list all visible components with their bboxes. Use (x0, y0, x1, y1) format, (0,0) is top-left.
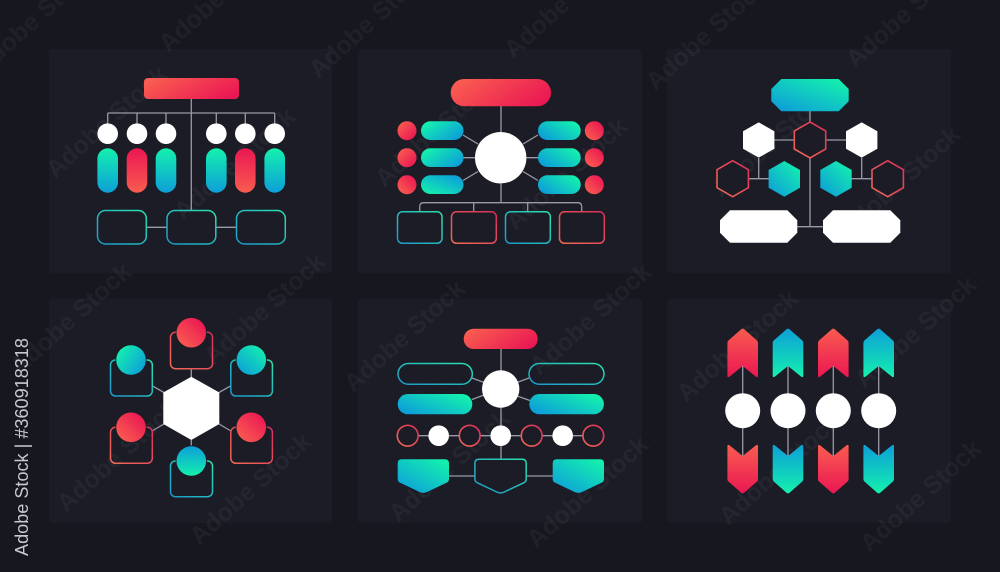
stock watermarks: Adobe Stock (339, 274, 471, 398)
middle outlined pentagon (475, 459, 526, 493)
down arrows (727, 445, 894, 493)
panel 4: radial hexagon diagram (110, 318, 272, 497)
panel 2: central circle diagram (398, 79, 604, 243)
outlined boxes (110, 332, 272, 497)
outlined pills (398, 364, 604, 384)
central circle (475, 132, 526, 183)
stock watermarks: Adobe Stock (370, 69, 502, 193)
stock watermarks: Adobe Stock (855, 434, 987, 558)
stock watermarks: Adobe Stock (199, 247, 331, 371)
white circles (428, 425, 573, 446)
connector lines (743, 366, 879, 456)
stock watermarks: Adobe Stock (185, 427, 317, 551)
left filled pentagon (398, 459, 449, 493)
stock watermarks: Adobe Stock (41, 60, 173, 184)
white circles (725, 393, 896, 428)
panel backgrounds (49, 49, 951, 523)
stock watermarks: Adobe Stock (384, 404, 516, 528)
white hexagons (743, 122, 877, 158)
connector lines (420, 106, 582, 212)
connector lines (408, 349, 593, 476)
outlined hexagons (717, 122, 903, 197)
central hexagon (163, 377, 219, 440)
stock watermarks: Adobe Stock (714, 407, 846, 531)
connector lines (733, 111, 888, 227)
panel 5: mixed flowchart (397, 329, 604, 493)
connector lines (108, 99, 275, 227)
side pills (421, 121, 581, 194)
white circles (97, 123, 285, 144)
up arrows (727, 329, 894, 377)
outlined circles (397, 425, 604, 446)
gradient circles (116, 318, 266, 476)
stock watermarks: Adobe Stock (672, 284, 804, 408)
top pill (464, 329, 538, 349)
panel 3: hexagon hierarchy (717, 79, 903, 243)
stock watermarks: Adobe Stock (707, 79, 839, 203)
vertical pills (97, 148, 285, 193)
stock watermarks: Adobe Stock (522, 430, 654, 554)
stock watermarks: Adobe Stock (169, 102, 301, 226)
outlined boxes (398, 212, 604, 243)
top octagon (771, 79, 849, 111)
outlined boxes (98, 210, 285, 244)
right filled pentagon (553, 459, 604, 493)
white octagons (720, 210, 900, 243)
top pill (451, 79, 551, 106)
connector lines (152, 368, 231, 451)
stock id side text: Adobe Stock | #360918318 (12, 338, 32, 556)
panel 1: org chart with pills (97, 78, 285, 244)
center circle (482, 370, 519, 408)
top bar (144, 78, 239, 99)
teal hexagons (769, 161, 852, 197)
red dots (398, 121, 604, 194)
filled pills (398, 394, 604, 414)
stock watermarks: Adobe Stock (850, 270, 982, 394)
stock watermarks: Adobe Stock (52, 394, 184, 518)
panel 6: arrow columns (725, 329, 896, 493)
stock watermarks: Adobe Stock (501, 112, 633, 236)
stock watermarks: Adobe Stock (5, 257, 137, 381)
stock watermarks: Adobe Stock (834, 120, 966, 244)
stock watermarks: Adobe Stock (525, 257, 657, 381)
